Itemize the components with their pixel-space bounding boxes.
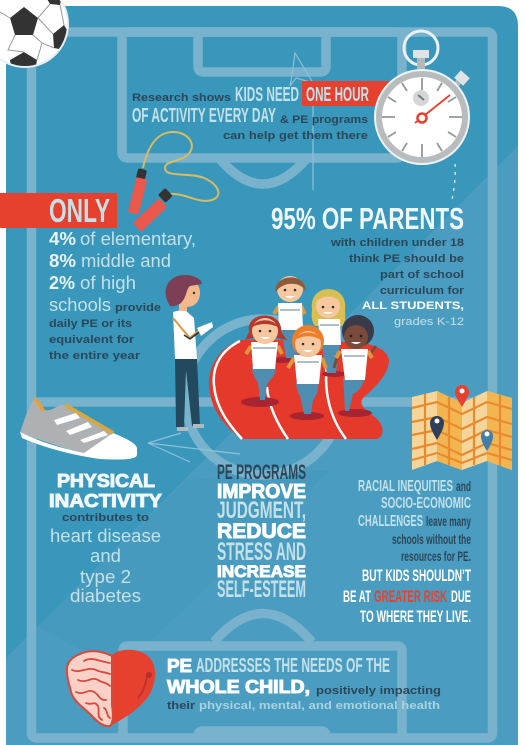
text block: physical inactivity: type 2 <box>80 567 131 587</box>
text block: school percentages: 8% <box>49 251 76 271</box>
text block: school percentages: 2% <box>49 273 75 293</box>
text block: physical inactivity: contributes to <box>62 512 149 524</box>
text block: school percentages: daily PE or its <box>49 318 132 330</box>
text block: school percentages <box>49 229 196 362</box>
text block: racial inequities: schools without the <box>392 531 471 547</box>
text block: 95% of parents: ALL STUDENTS, <box>362 300 464 312</box>
figure: orange-haired child <box>288 325 326 414</box>
text block: school percentages: middle and <box>81 251 171 271</box>
text block: PE programs: SELF-ESTEEM <box>217 576 306 603</box>
icon: jump rope <box>128 132 218 232</box>
intro text block: KIDS NEED <box>235 84 299 106</box>
text block: PE programs: JUDGMENT, <box>217 497 306 524</box>
text block: PE programs: STRESS AND <box>217 538 306 566</box>
illustration: red running track <box>209 340 389 439</box>
text block: racial inequities: leave many <box>426 513 471 529</box>
intro text block: Research shows <box>132 92 231 104</box>
text block: school percentages: of high <box>80 273 136 293</box>
intro text block: OF ACTIVITY EVERY DAY <box>132 105 276 127</box>
text block: school percentages: of elementary, <box>80 229 196 249</box>
text block: physical inactivity: INACTIVITY <box>49 491 162 511</box>
banner: only <box>0 192 117 229</box>
text block: physical inactivity: heart disease <box>50 526 161 546</box>
dotted line from stopwatch <box>452 164 455 200</box>
text block: 95% of parents: think PE should be <box>349 253 464 265</box>
intro text block <box>132 81 392 142</box>
text block: physical inactivity: PHYSICAL <box>57 471 155 491</box>
text block: 95% of parents: part of school <box>380 269 464 281</box>
icon: folded map with pins <box>412 385 512 470</box>
text block: school percentages: 4% <box>49 229 76 249</box>
text block: 95% of parents: grades K-12 <box>394 316 464 328</box>
text block: physical inactivity: and <box>90 546 121 566</box>
text block: 95% of parents: with children under 18 <box>330 237 464 249</box>
intro text block: ONE HOUR <box>306 84 369 106</box>
figure: blonde girl <box>312 289 345 373</box>
text block: PE programs: IMPROVE <box>217 481 306 503</box>
figure: boy at back <box>274 276 306 358</box>
text block: racial inequities: DUE <box>451 587 471 606</box>
text block: racial inequities: GREATER RISK <box>374 587 447 606</box>
text block: whole child: positively impacting <box>316 685 441 697</box>
text block: PE programs: REDUCE <box>217 520 306 543</box>
text block: racial inequities <box>343 478 471 626</box>
icon: stopwatch <box>374 31 470 165</box>
text block: PE programs: INCREASE <box>217 562 306 581</box>
text block: PE programs: PE PROGRAMS <box>217 461 306 484</box>
figure: red-haired girl <box>245 316 287 400</box>
icon: running shoe <box>20 397 137 460</box>
intro text block: can help get them there <box>223 130 368 142</box>
text block: whole child: physical, mental, and emotional health <box>199 700 440 712</box>
icon: soccer ball <box>0 0 72 72</box>
text block: racial inequities: RACIAL INEQUITIES <box>358 478 453 495</box>
text block: physical inactivity <box>49 471 162 606</box>
figure: dark-haired child <box>334 315 376 411</box>
text block: racial inequities: and <box>456 478 471 494</box>
text block: whole child: WHOLE CHILD, <box>167 677 310 697</box>
text block: 95% of parents: curriculum for <box>380 285 465 297</box>
text block: 95% of parents <box>271 201 465 328</box>
text block: racial inequities: CHALLENGES <box>358 513 423 530</box>
text block: whole child: PE <box>167 656 192 676</box>
text block: school percentages: provide <box>115 302 161 314</box>
banner: only: ONLY <box>49 192 110 229</box>
text block: physical inactivity: diabetes <box>70 586 141 606</box>
one hour highlight <box>302 81 392 106</box>
text block: school percentages: schools <box>49 295 111 315</box>
text block: school percentages: equivalent for <box>49 334 135 346</box>
text block: PE programs <box>217 461 306 603</box>
text block: whole child: their <box>167 700 196 712</box>
text block: racial inequities: resources for PE. <box>401 548 471 564</box>
text block: whole child <box>167 655 441 712</box>
text block: school percentages: the entire year <box>49 350 141 362</box>
icon: brain and heart <box>67 650 155 726</box>
text block: racial inequities: BE AT <box>343 587 371 606</box>
figure: teacher with clipboard <box>166 275 213 431</box>
text block: racial inequities: SOCIO-ECONOMIC <box>381 495 471 512</box>
intro text block: & PE programs <box>280 114 368 126</box>
text block: whole child: ADDRESSES THE NEEDS OF THE <box>196 655 390 677</box>
